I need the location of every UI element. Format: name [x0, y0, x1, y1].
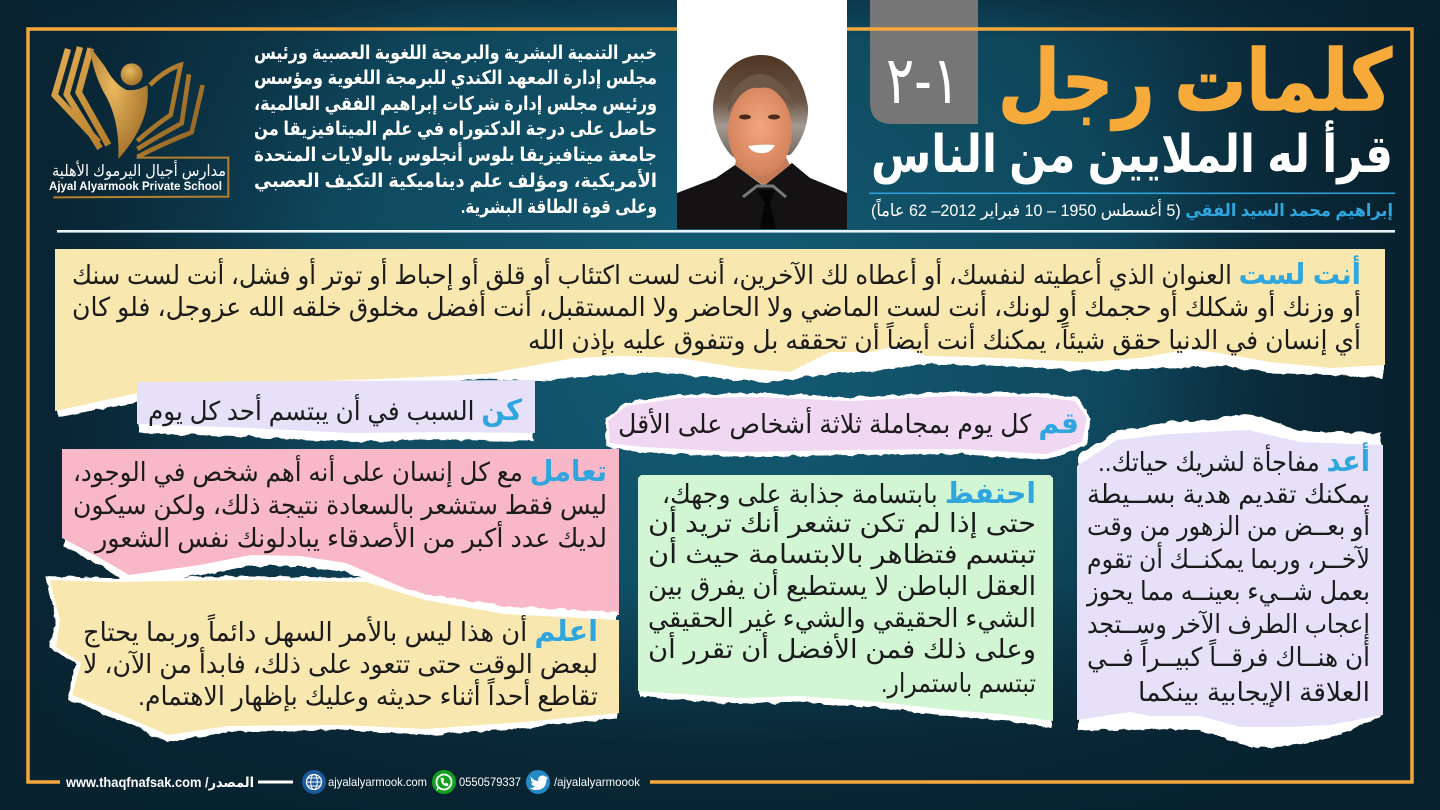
text	[83, 613, 598, 712]
tie	[757, 190, 776, 229]
biography text: الأمريكية، ومؤلف علم ديناميكية التكيف العصبي	[254, 169, 657, 192]
collar	[743, 186, 786, 197]
eyes	[739, 114, 780, 120]
part number 1-2: ١-٢	[886, 43, 960, 117]
text: تعامل مع كل إنسان على أنه أهم شخص في الوجود،	[73, 454, 607, 488]
panel: surprise your partner (lavender)	[1077, 414, 1383, 747]
text	[1085, 442, 1370, 708]
text: يمكنك تقديم هدية بســيطة	[1087, 479, 1370, 510]
icon: globe	[302, 770, 326, 794]
source: www.thaqfnafsak.com /المصدر	[65, 774, 254, 790]
face	[728, 86, 792, 176]
smile	[748, 145, 775, 153]
text: تبتسم فتظاهر بالابتسامة حيث أن	[648, 536, 1036, 570]
text: ليس فقط ستشعر بالسعادة نتيجة ذلك، ولكن سيكون	[73, 490, 607, 521]
text	[73, 454, 607, 554]
text: أو بعــض من الزهور من وقت	[1087, 508, 1370, 542]
school logo	[49, 47, 228, 197]
phone: 0550579337	[459, 775, 521, 789]
blue divider under subtitle	[869, 192, 1395, 194]
text: كن السبب في أن يبتسم أحد كل يوم	[148, 393, 522, 427]
text: حتى إذا لم تكن تشعر أنك تريد أن	[648, 505, 1036, 539]
text: أعد مفاجأة لشريك حياتك..	[1098, 442, 1370, 478]
text: لديك عدد أكبر من الأصدقاء يبادلونك نفس الشعور	[93, 520, 607, 554]
panel: be the reason (lavender)	[137, 380, 535, 442]
panel: know (yellow)	[46, 576, 619, 742]
fringe	[728, 74, 794, 112]
biography text: جامعة ميتافيزيقا بلوس أنجلوس بالولايات المتحدة	[254, 142, 657, 166]
text: تبتسم باستمرار.	[881, 668, 1036, 699]
panel: keep a smile (green)	[638, 475, 1053, 727]
hair	[713, 55, 808, 157]
panel: compliment three people (lilac)	[605, 392, 1091, 460]
text: احتفظ بابتسامة جذابة على وجهك،	[662, 478, 1036, 510]
text: أنت لست العنوان الذي أعطيته لنفسك، أو أعطاه لك الآخرين، أنت لست اكتئاب أو قلق أو إحباط أو توتر أو فشل، أنت لست سنك	[72, 255, 1361, 291]
panel: you are not (yellow)	[55, 249, 1385, 417]
icon: twitter	[526, 770, 550, 794]
logo Arabic name: مدارس أجيال اليرموك الأهلية	[52, 160, 226, 181]
text: العلاقة الإيجابية بينكما	[1138, 677, 1370, 708]
text: تقاطع أحداً أثناء حديثه وعليك بإظهار الاهتمام.	[138, 677, 598, 712]
text: قم كل يوم بمجاملة ثلاثة أشخاص على الأقل	[618, 406, 1079, 440]
logo English name: Ajyal Alyarmook Private School	[49, 179, 222, 193]
logo mark	[53, 47, 228, 197]
biography text: خبير التنمية البشرية والبرمجة اللغوية العصبية ورئيس	[254, 43, 657, 64]
biography text: ورئيس مجلس إدارة شركات إبراهيم الفقي العالمية،	[254, 94, 657, 115]
text	[648, 478, 1036, 699]
text: اعلم أن هذا ليس بالأمر السهل دائماً وربما يحتاج	[83, 613, 598, 648]
grey part-number tab	[870, 0, 978, 124]
biography text: مجلس إدارة المعهد الكندي للبرمجة اللغوية ومؤسس	[254, 68, 657, 90]
photo	[677, 0, 847, 229]
neck	[735, 155, 790, 186]
suit	[677, 163, 847, 229]
text: الشيء الحقيقي والشيء غير الحقيقي	[648, 603, 1036, 634]
byline: إبراهيم محمد السيد الفقي (5 أغسطس 1950 – 10 فبراير 2012– 62 عاماً)	[871, 197, 1393, 221]
text: العقل الباطن لا يستطيع أن يفرق بين	[648, 568, 1036, 602]
panel: deal with everyone (pink)	[62, 449, 619, 615]
website: ajyalalyarmook.com	[328, 775, 427, 789]
twitter handle: /ajyalalyarmoook	[554, 775, 641, 789]
text: أي إنسان في الدنيا حقق شيئاً، يمكنك أنت أيضاً أن تحققه بل وتتفوق عليه بإذن الله	[528, 321, 1361, 356]
text: أن هنــاك فرقــاً كبيــراً فــي	[1087, 638, 1370, 673]
text	[72, 255, 1361, 356]
text: بعمل شــيء بعينــه مما يحوز	[1085, 576, 1370, 607]
biography text: وعلى قوة الطاقة البشرية.	[461, 197, 657, 218]
icon: whatsapp	[432, 770, 456, 794]
text: أو وزنك أو شكلك أو حجمك أو لونك، أنت لست الماضي ولا الحاضر ولا المستقبل، أنت أفضل مخلوق خلقه الله عزوجل، فلو كان	[72, 289, 1361, 323]
biography text	[254, 43, 657, 218]
text: إعجاب الطرف الآخر وســتجد	[1087, 609, 1370, 640]
text: لآخــر، وربما يمكنــك أن تقوم	[1087, 541, 1370, 575]
biography text: حاصل على درجة الدكتوراه في علم الميتافيزيقا من	[254, 119, 657, 140]
footer	[65, 770, 641, 794]
white divider	[57, 230, 1395, 233]
text: وعلى ذلك فمن الأفضل أن تقرر أن	[648, 631, 1036, 665]
text: لبعض الوقت حتى تتعود على ذلك، فابدأ من الآن، لا	[83, 646, 598, 680]
